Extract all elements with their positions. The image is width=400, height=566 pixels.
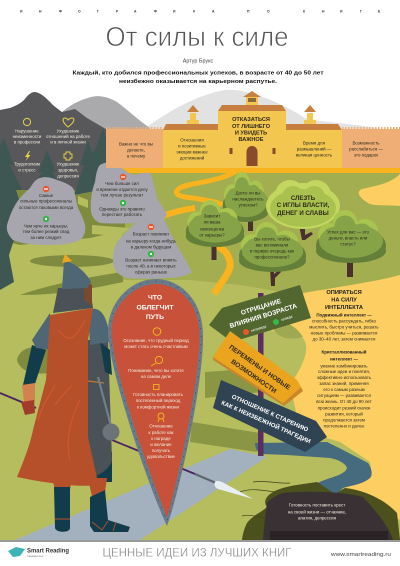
tree: success meaning: деньги, власть или — [329, 236, 368, 240]
helmet — [62, 261, 91, 289]
shield — [108, 279, 203, 526]
fort wall text: делаете, — [127, 148, 145, 152]
fort: ОТ ЛИШНЕГО — [232, 124, 271, 130]
shield text 4: Отношение — [149, 424, 173, 428]
legs and boots — [90, 452, 112, 482]
icon: medal — [158, 413, 164, 422]
panel: intellect: Подвижный интеллект — — [316, 312, 372, 318]
tree: self esteem: от карьеры? — [199, 232, 225, 238]
icon: health cross — [64, 152, 72, 160]
fort wall text: а почему — [127, 154, 146, 158]
boulder 3: Возраст повлияет — [133, 232, 169, 236]
tree: remembered: профессионала? — [255, 254, 290, 260]
shield text 3: к комфортной жизни — [137, 404, 179, 410]
fort: достижений — [180, 156, 205, 160]
panel: intellect: запас знаний, применяя — [319, 381, 369, 386]
shield text 3: постепенный переход — [136, 398, 181, 403]
panel: intellect: умение комбинировать — [320, 364, 368, 368]
boulder 1: Самые — [39, 193, 54, 198]
tree: remembered: вас вспоминали — [256, 242, 289, 248]
rock with moss — [242, 482, 400, 540]
top label: ИНФОГРАФИКАПОКНИГЕ — [20, 10, 381, 14]
sign: changes: ПЕРЕМЕНЫ И НОВЫЕ — [228, 344, 292, 392]
fort: Возможность — [352, 140, 380, 146]
tree: main question: ДЕНЕГ И СЛАВЫ — [277, 210, 329, 217]
boulder 3: сферах раньше — [135, 270, 168, 274]
panel: intellect: всю жизнь. От 40 до 90 лет — [316, 399, 372, 404]
fort: это подарок — [354, 152, 378, 158]
panel: intellect: его к самым разным — [323, 387, 365, 392]
shield text 3: Готовность планировать — [133, 392, 184, 397]
sign: aging — [213, 380, 327, 452]
tree: success meaning: Успех для вас — это — [327, 230, 369, 234]
tree: enjoy success — [223, 172, 269, 231]
sign: denial: неправда — [250, 324, 267, 333]
shield text 4: получать — [152, 448, 171, 453]
panel: intellect: ситуациям — развивается — [317, 393, 371, 398]
panel: intellect: происходит резкий скачок — [318, 406, 370, 410]
sign: denial: ОТРИЦАНИЕ — [240, 298, 283, 317]
boulder 3: на карьеру когда-нибудь — [126, 238, 177, 244]
panel: intellect: развития, который — [325, 412, 363, 416]
rock with moss: апатия, депрессия — [298, 516, 337, 520]
fort: ОТКАЗАТЬСЯ — [232, 117, 270, 123]
icon: smile — [153, 328, 161, 335]
grey-blue path — [15, 449, 267, 540]
boulder 3: после 40, а в некоторых — [126, 264, 176, 268]
panel: intellect: новые проблемы — развивается — [311, 330, 378, 336]
panel: intellect: интеллект — — [330, 356, 359, 362]
shield text 2: на самом деле — [141, 374, 172, 379]
panel: intellect: эффективно использовать — [317, 375, 372, 380]
text: health: здоровья, — [58, 168, 78, 172]
spear — [0, 393, 253, 499]
face — [84, 280, 92, 306]
fort: расслабиться — — [349, 146, 383, 152]
footer: Smart Reading — [27, 548, 69, 554]
fort: и позитивные — [178, 144, 206, 148]
shield text 1: может стать очень счастливым — [124, 344, 188, 349]
tree: enjoy success: успехом? — [238, 202, 258, 208]
tree: success meaning: статус? — [340, 242, 356, 246]
fort — [106, 91, 400, 168]
ground — [0, 172, 400, 541]
tree: self esteem: самооценка — [200, 226, 225, 232]
subtitle: неизбежно оказывается на карьерном распутье. — [119, 78, 277, 85]
tree: self esteem — [186, 200, 244, 260]
text: workaholism: Трудоголизм — [14, 162, 40, 166]
boulder 2: Однажды это правило — [99, 206, 145, 212]
panel: intellect: мыслить, быстро учиться, решать — [309, 324, 379, 330]
boulder 3 — [113, 215, 192, 279]
problems list on mountain — [13, 118, 91, 178]
tree: self esteem: Зависит — [204, 214, 220, 218]
boulder 1: тем более резкий спад — [23, 229, 70, 234]
panel: intellect: сложные идеи и понятия, — [318, 369, 370, 374]
sign: denial: ВЛИЯНИЯ ВОЗРАСТА — [229, 303, 298, 330]
tree: main question — [266, 180, 340, 240]
mail coif — [53, 288, 93, 313]
shield heading: ОБЛЕГЧИТ — [137, 304, 174, 312]
panel: intellect: Кристаллизованный — [322, 350, 367, 354]
slogan: ЦЕННЫЕ ИДЕИ ИЗ ЛУЧШИХ КНИГ — [102, 548, 292, 560]
text: relationships: отношений на работе — [46, 134, 91, 139]
tree: main question: С ИГЛЫ ВЛАСТИ, — [277, 202, 330, 209]
tree: remembered: в первую очередь как — [250, 248, 294, 254]
panel: intellect — [309, 290, 379, 428]
shield text 4: и желание — [150, 442, 172, 447]
panel: intellect: НА СИЛУ — [331, 298, 357, 304]
panel: intellect: постепенно и далее — [324, 424, 365, 428]
tree: success meaning — [316, 210, 386, 277]
boulder 2 — [91, 162, 167, 224]
boulder 1: остаются таковыми всегда — [19, 205, 74, 210]
boulder 1 — [7, 177, 85, 245]
text: profession: в профессии — [14, 140, 41, 144]
text: health: депрессия — [57, 174, 79, 178]
left mountain trees — [0, 128, 124, 290]
text: relationships: Ухудшение — [57, 128, 80, 134]
sign: aging: ОТНОШЕНИЕ К СТАРЕНИЮ — [230, 393, 310, 434]
text: profession: Нарушение — [15, 128, 39, 134]
fort: великая ценность — [296, 152, 333, 158]
boulder 2: перестает работать — [102, 212, 143, 217]
tree: main question: СЛЕЗТЬ — [291, 195, 316, 202]
boulder 3: в далеком будущем — [131, 244, 171, 250]
rock with moss: Готовность поставить крест — [289, 502, 345, 508]
fort wall text: Важно не что вы — [119, 142, 153, 146]
shield text 4: удовольствие — [147, 454, 176, 459]
panel: intellect: до 30–40 лет, затем снижается — [313, 336, 376, 342]
shield heading: ЧТО — [148, 294, 162, 302]
author: Артур Брукс — [183, 58, 214, 64]
icon: flower — [23, 118, 31, 126]
fort: Отношения — [180, 138, 204, 142]
sign: aging: КАК К НЕИЗБЕЖНОЙ ТРАГЕДИИ — [220, 399, 312, 445]
boulder 2: Чем больше сил — [105, 181, 139, 186]
ground patches and road — [0, 167, 400, 520]
sign: changes: ВОЗМОЖНОСТИ — [229, 359, 278, 395]
belt and mace — [88, 381, 104, 383]
tree: enjoy success: Долго ли вы — [236, 190, 260, 196]
title: От силы к силе — [106, 21, 288, 52]
panel: intellect: ОПИРАТЬСЯ — [326, 290, 362, 296]
sign: denial — [209, 285, 311, 342]
torso mail — [87, 340, 112, 478]
text: workaholism: и стресс — [18, 168, 36, 172]
shield heading: ПУТЬ — [146, 314, 164, 321]
boulder 1: сильные профессионалы — [20, 198, 72, 204]
icon: broken heart — [63, 118, 74, 127]
background mountains — [0, 90, 400, 200]
fort: эмоции важнее — [176, 150, 208, 154]
website: www.smartreading.ru — [330, 552, 391, 558]
shield text 4: к работе как — [149, 430, 174, 435]
panel: intellect: продолжается затем — [323, 418, 365, 422]
fort: И УВИДЕТЬ — [235, 130, 267, 136]
rock with moss: на своей жизни — отчаяние, — [288, 510, 346, 514]
sign: denial: правда — [280, 315, 293, 322]
knight — [17, 254, 130, 532]
fort: Время для — [303, 140, 326, 146]
shoulders — [32, 313, 52, 350]
shield text 4: к награде — [151, 436, 171, 441]
sign: changes — [213, 331, 303, 406]
fort: размышлений — — [297, 146, 332, 152]
shield text 1: Осознание, что трудный период — [123, 338, 189, 343]
panel: intellect: способность рассуждать, гибко — [312, 318, 376, 324]
text: profession: неизменности — [13, 134, 42, 139]
shield text 2: Понимание, чего вы хотите — [128, 368, 184, 373]
boulder 3: Возраст начинает влиять — [125, 258, 177, 262]
icon: magnifier — [151, 356, 163, 366]
boulder 1: за ним следует — [31, 235, 61, 240]
boulder 2: и времени отдается делу — [96, 187, 148, 192]
subtitle — [72, 70, 324, 85]
footer — [0, 540, 400, 560]
icon: lightning — [25, 151, 30, 161]
text: health: Ухудшение — [57, 162, 80, 166]
cape — [17, 308, 97, 486]
signpost — [258, 293, 264, 456]
tree: remembered — [239, 222, 306, 286]
fort: ВАЖНОЕ — [239, 137, 264, 143]
river — [255, 442, 372, 496]
subtitle: Каждый, кто добился профессиональных успехов, в возрасте от 40 до 50 лет — [72, 70, 324, 76]
logo — [8, 547, 25, 557]
boulder 1: Чем ярче их карьеры, — [24, 224, 68, 228]
boulder 2: тем лучше результат — [101, 192, 143, 198]
tree: enjoy success: наслаждаетесь — [232, 196, 264, 202]
tree: self esteem: ли ваша — [204, 220, 221, 224]
panel: intellect: ИНТЕЛЛЕКТА — [325, 305, 363, 311]
tree: remembered: Вы хотите, чтобы — [254, 236, 290, 242]
icon: calendar — [154, 384, 159, 390]
text: relationships: и в личной жизни — [50, 140, 86, 144]
cracks — [240, 481, 290, 518]
footer: Саммари книг — [27, 555, 43, 558]
arm — [23, 345, 46, 387]
